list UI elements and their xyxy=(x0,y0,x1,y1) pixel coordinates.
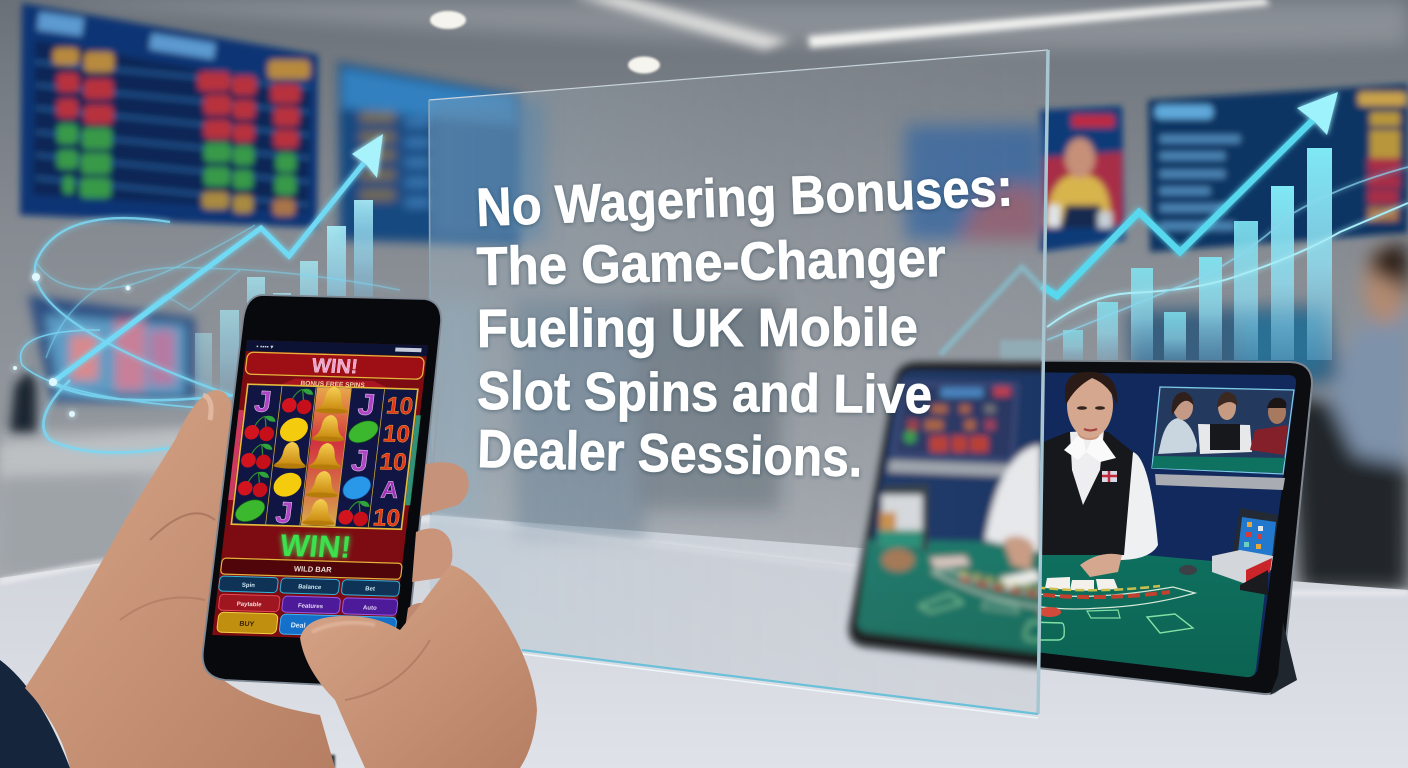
reel symbols: J xyxy=(350,445,370,478)
phone: green win label: WIN! xyxy=(278,528,353,565)
background: lower left monitor xyxy=(10,295,195,432)
phone: buttons: Auto xyxy=(363,605,377,612)
title: Slot Spins and Live xyxy=(477,361,932,425)
glass: blurred reflected screens xyxy=(429,100,1045,540)
phone: side lights xyxy=(228,410,421,505)
hand: palm and fingers behind phone xyxy=(25,390,335,768)
hand: sleeve xyxy=(0,660,70,768)
glass panel surface and edges xyxy=(429,50,1048,718)
phone: game screen: ▪ ▪▪▪▪ ▾ xyxy=(256,344,274,351)
reel symbols: 10 xyxy=(378,449,408,476)
reel symbols: J xyxy=(356,389,377,422)
phone: buttons: Bet xyxy=(365,586,375,593)
ceiling xyxy=(0,0,1408,74)
title: Fueling UK Mobile xyxy=(477,297,918,359)
background: right monitors xyxy=(1040,84,1408,252)
title: The Game-Changer xyxy=(476,228,946,297)
tablet: behind glass (blurred) xyxy=(843,356,1041,673)
reel symbols: 10 xyxy=(385,393,415,420)
hand: fingers right of phone xyxy=(402,462,469,652)
phone: top win label: WIN! xyxy=(311,355,359,378)
phone: buttons: Paytable xyxy=(236,602,262,608)
arrow: right growth chart bars xyxy=(1063,148,1332,360)
phone: game screen: WILD BAR xyxy=(293,564,333,574)
reel symbols: J xyxy=(253,386,273,419)
phone: game screen: BONUS FREE SPINS xyxy=(300,380,366,389)
background: left scoreboard xyxy=(20,3,318,228)
table surface xyxy=(0,515,1408,768)
phone: buttons: BUY xyxy=(239,621,255,628)
reel symbols: 10 xyxy=(381,421,411,448)
title xyxy=(475,157,1014,488)
hand: thumb on screen xyxy=(300,565,537,768)
tablet: in front xyxy=(1040,360,1313,696)
phone: game screen xyxy=(212,340,429,640)
reel symbols: J xyxy=(274,497,294,530)
background: lower counter xyxy=(0,420,430,578)
title: No Wagering Bonuses: xyxy=(475,157,1014,238)
chart: left rising bars xyxy=(195,200,373,408)
reel symbols: 10 xyxy=(371,505,401,532)
background: lower right monitor and person xyxy=(1128,244,1408,590)
background: second screen xyxy=(338,62,520,245)
swirl lines xyxy=(21,218,400,452)
phone: buttons: Deal xyxy=(290,622,306,630)
arrow: right growth trend xyxy=(1042,92,1408,340)
glass panel xyxy=(429,100,1050,714)
phone: buttons xyxy=(214,576,401,637)
reel symbols: A xyxy=(379,477,400,504)
phone xyxy=(203,295,441,687)
title: Dealer Sessions. xyxy=(477,419,863,488)
arrow: left growth trend xyxy=(53,134,383,382)
phone: buttons: Features xyxy=(297,603,324,610)
phone: buttons: Spin xyxy=(241,583,255,589)
reel symbols xyxy=(230,384,415,533)
phone: buttons: Balance xyxy=(298,584,322,591)
